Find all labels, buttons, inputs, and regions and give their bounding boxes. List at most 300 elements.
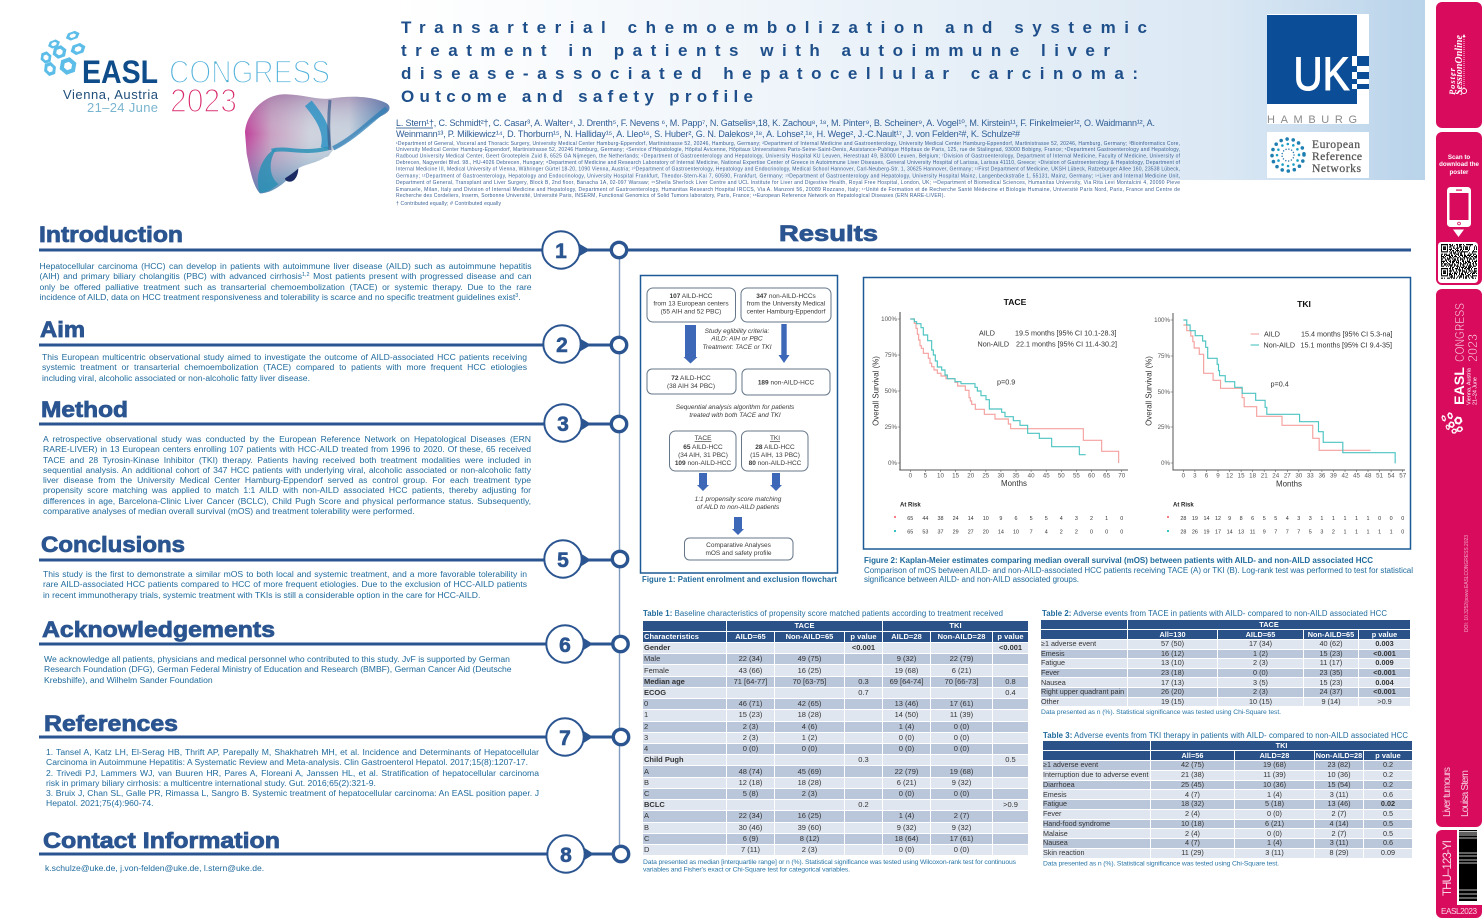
table 2: TACE adverse events: 0.004 [1375, 678, 1394, 687]
table 1: baseline characteristics: 43 (66) [739, 666, 762, 675]
table 2: TACE adverse events: 16 (12) [1161, 649, 1184, 658]
heading: Contact Information: Contact Information [43, 828, 280, 853]
table 1: baseline characteristics: 22 (79) [950, 654, 973, 663]
table 1: baseline characteristics: 3 [644, 733, 648, 742]
at-risk table: TKI: 19 [1204, 530, 1210, 536]
text: aim: including viral, alcoholic associated or non-alcoholic fatty liver disease. [42, 373, 310, 383]
step marker 3 [544, 404, 627, 442]
at-risk table: TKI: 2 [1332, 530, 1335, 536]
table 3: TKI adverse events: Fever [1043, 809, 1061, 818]
liver illustration [245, 94, 390, 193]
side panel: poster session online: SessionOnline [1454, 34, 1465, 95]
table 1: baseline characteristics: 0 (0) [954, 722, 969, 731]
table 2: TACE adverse events: 19 (15) [1161, 697, 1184, 706]
table 1: baseline characteristics: 8 (12) [800, 834, 819, 843]
chart: TKI: Months [1276, 480, 1302, 488]
table 1: baseline characteristics: AILD=28 [891, 632, 922, 641]
table 1: baseline characteristics: 16 (25) [798, 666, 821, 675]
affiliations: Germany; ¹²Department of Gastroenterology, Hepatology and Endocrinology, University Hospital Frankfurt, Theodor-Stern-Kai 7, 60590, Frankfurt, Germany; ¹³Department of Gastroenterology and Hepatology, University Hospital Mainz, Langenbeckstraße 1, 55131, Mainz, Germany; ¹⁴Liver and Internal Medicine Unit, [396, 173, 1180, 179]
topic: Liver tumours [1442, 767, 1453, 817]
table 1: baseline characteristics: 0 (0) [954, 845, 969, 854]
at-risk table: TKI: At Risk [1173, 502, 1194, 508]
table 2: TACE adverse events: 23 (18) [1161, 668, 1184, 677]
table 1: baseline characteristics: 22 (79) [895, 767, 918, 776]
text: conclusions [43, 569, 527, 600]
side panel: poster session online: Poster [1447, 67, 1457, 95]
table 2: TACE adverse events: 0.009 [1375, 658, 1394, 667]
affiliations [396, 141, 1181, 207]
table 1: baseline characteristics: 0.8 [1005, 677, 1016, 686]
box: non-AILD cohort [741, 288, 831, 322]
table 2: TACE adverse events: AILD=65 [1246, 630, 1275, 638]
at-risk table: TACE: 10 [983, 516, 989, 522]
table 3: TKI adverse events: 2 (7) [1331, 829, 1346, 838]
side panel: congress logo and session details [1436, 289, 1482, 827]
table 1: baseline characteristics: 1 (2) [802, 733, 817, 742]
at-risk table: TACE: 9 [999, 516, 1002, 522]
table 1: baseline characteristics [643, 621, 1028, 855]
chart: TKI: 42 [1342, 472, 1349, 480]
text: references: 1. Tansel A, Katz LH, El-Serag HB, Thrift AP, Parepally M, Shakhatreh MH, et al. Incidence and Determinants of Hepatocellular [46, 747, 539, 757]
table 1: baseline characteristics: >0.9 [1003, 800, 1018, 809]
table 3: TKI adverse events: Interruption due to adverse event [1043, 770, 1148, 779]
table 1: baseline characteristics: 2 [644, 722, 648, 731]
table 3: TKI adverse events: Nausea [1043, 838, 1068, 847]
table 1: baseline characteristics: Characteristics [644, 632, 699, 641]
icon: down triangle [1453, 230, 1464, 237]
at-risk table: TKI: 7 [1286, 530, 1289, 536]
table 2: TACE adverse events: 17 (34) [1249, 639, 1272, 648]
table 1: baseline characteristics: 12 (18) [739, 778, 762, 787]
table 3: TKI adverse events: 4 (7) [1185, 838, 1200, 847]
table 1: baseline characteristics: 4 [644, 744, 648, 753]
chart: TACE: 30 [997, 472, 1005, 480]
table 1: baseline characteristics: 0.3 [858, 677, 869, 686]
rotated EASL logo: CONGRESS [1452, 303, 1467, 362]
table 2: TACE adverse events: 13 (10) [1161, 658, 1184, 667]
table 3: TKI adverse events: TKI [1276, 740, 1287, 750]
table 3: TKI adverse events: 6 (21) [1265, 819, 1284, 828]
affiliations: Internal Medicine III, Medical University of Vienna, Währinger Gürtel 18-20, 1090 Vienna, Austria; ¹⁰Department of Gastroenterology, Hepatology and Endocrinology, Medical School Hannover, Carl-Neuberg-Str. 1, 30625 Hannover, Germany; ¹¹First Department of Medicine, UKSH Lübeck, Ratzeburger Allee 160, 23538 Lübeck, [396, 167, 1180, 173]
table 3: TKI adverse events: 0 (0) [1267, 829, 1282, 838]
table 1: baseline characteristics: BCLC [644, 800, 665, 809]
chart: TACE: 40 [1028, 472, 1035, 480]
box: 72 AILD-HCC [647, 369, 736, 394]
table 3: TKI adverse events: 2 (4) [1185, 809, 1200, 818]
at-risk table: TACE: At Risk [900, 502, 921, 508]
chart: TKI: Non-AILD [1264, 340, 1295, 350]
table 3: TKI adverse events: Emesis [1043, 790, 1067, 799]
table 3: TKI adverse events: 8 (29) [1329, 848, 1349, 857]
step marker 2 [543, 325, 627, 363]
at-risk table: TACE: 2 [1090, 516, 1093, 522]
box: TACE group: 109 non-AILD-HCC [675, 460, 731, 467]
at-risk table: TACE: 20 [983, 530, 989, 536]
chart: TACE [872, 297, 1128, 488]
table 1: baseline characteristics: 2 (3) [743, 733, 758, 742]
chart: TKI: 39 [1330, 472, 1337, 480]
table 3: TKI adverse events: 2 (7) [1331, 809, 1346, 818]
side panel: poster session online [1436, 2, 1482, 128]
table 3: TKI adverse events: 3 (11) [1330, 838, 1348, 847]
chart: TACE: 0 [909, 472, 913, 480]
heading: Method: Method [41, 397, 128, 422]
at-risk table: TKI: 1 [1332, 516, 1335, 522]
table 1: baseline characteristics: A [644, 767, 649, 776]
table 1: baseline characteristics: B [644, 823, 649, 832]
chart: TKI: 15.1 months [95% CI 9.4-35] [1300, 340, 1392, 350]
propensity matching note: 1:1 propensity score matching [695, 496, 782, 503]
figure 2 caption: Figure 2: Kaplan-Meier estimates comparing median overall survival (mOS) between patients with AILD- and non-AILD associated HCC [864, 556, 1373, 565]
at-risk table: TACE: 53 [922, 530, 928, 536]
at-risk table: TKI: 0 [1390, 516, 1393, 522]
table 1: baseline characteristics: 30 (46) [739, 823, 762, 832]
table 3: TKI adverse events: 19 (68) [1263, 760, 1286, 769]
poster title: Transarterial chemoembolization and systemic [401, 18, 1147, 37]
table 3: TKI adverse events: 13 (46) [1327, 799, 1351, 808]
table 1: baseline characteristics: Non-AILD=28 [938, 632, 985, 641]
at-risk table: TACE: 0 [1090, 530, 1093, 536]
at-risk table: TACE: 7 [1030, 530, 1033, 536]
table 2: TACE adverse events: Right upper quadrant pain [1041, 687, 1124, 696]
heading: Introduction: Introduction [39, 222, 183, 247]
table 1: baseline characteristics: 6 (21) [897, 778, 916, 787]
at-risk table: TKI: 3 [1320, 530, 1323, 536]
table 1: baseline characteristics: C [644, 834, 649, 843]
heading: Aim: Aim [40, 317, 85, 342]
side panel: scan to download: Scan to [1448, 154, 1470, 161]
table 2: TACE adverse events: 2 (3) [1253, 658, 1268, 667]
text: method: A retrospective observational study was conducted by the European Reference Network on Hepatological Diseases (ERN [43, 434, 531, 444]
box: non-AILD cohort: 347 non-AILD-HCCs [756, 293, 817, 300]
eligibility criteria note: Treatment: TACE or TKI [702, 344, 772, 351]
authors [396, 118, 1155, 139]
table 1: baseline characteristics: 6 (21) [952, 666, 971, 675]
at-risk table: TKI: 0 [1401, 516, 1404, 522]
text: introduction: only be offered palliative treatment such as transarterial chemoembolization (TACE) or systemic therapy. Due to the rare [40, 282, 532, 292]
at-risk table: TACE: 0 [1120, 516, 1123, 522]
rotated EASL logo [1441, 303, 1480, 434]
authors: L. Stern¹†, C. Schmidt²†, C. Casar³, A. Walter⁴, J. Drenth⁵, F. Nevens ⁶, M. Papp⁷, N. Gatselis⁸,18, K. Zachou⁸, ¹⁸, M. Pinter⁹, B. Scheiner⁹, A. Vogel¹⁰, M. Kirstein¹¹, F. Finkelmeier¹², O. Waidmann¹², A. [396, 118, 1155, 128]
table 1: baseline characteristics: 0.7 [858, 688, 869, 697]
at-risk table: TKI: 26 [1192, 530, 1198, 536]
table 3: TKI adverse events: Malaise [1043, 829, 1068, 838]
table 2: TACE adverse events: 2 (3) [1253, 687, 1268, 696]
table 2: TACE adverse events: 26 (20) [1161, 687, 1184, 696]
chart: TKI: 48 [1365, 472, 1372, 480]
table 2: TACE adverse events: Fever [1041, 668, 1059, 677]
chart: TACE: 25 [982, 472, 990, 480]
table 3: TKI adverse events: 0 (0) [1267, 809, 1282, 818]
table 3: TKI adverse events: Hand-food syndrome [1043, 819, 1110, 828]
table 3: TKI adverse events: 23 (82) [1327, 760, 1351, 769]
chart: TKI: 25% [1158, 424, 1170, 431]
table 3: TKI adverse events: Fatigue [1043, 799, 1067, 808]
chart: TACE: 50% [885, 388, 897, 395]
arrow: to analyses [732, 517, 744, 535]
chart: TKI: AILD [1264, 330, 1280, 338]
step marker 7: 7 [559, 727, 571, 750]
European Reference Networks logo [1267, 132, 1369, 178]
box: 189 non-AILD-HCC [742, 369, 830, 395]
at-risk table: TACE: 6 [1014, 516, 1018, 522]
box: comparative analyses [684, 538, 793, 560]
chart: TKI: 24 [1272, 472, 1280, 480]
at-risk table: TACE: 65 [907, 516, 913, 522]
text: method [43, 434, 531, 516]
eligibility criteria note: AILD: AIH or PBC [710, 336, 763, 342]
box: AILD cohort: from 13 European centers [653, 300, 729, 308]
table 3: TKI adverse events: 42 (75) [1181, 760, 1204, 769]
chart: TKI: Overall Survival (%) [1144, 356, 1154, 426]
figure 2 caption: significance between AILD- and non-AILD associated groups. [864, 575, 1079, 584]
at-risk table: TKI: 13 [1238, 530, 1244, 536]
table 1: baseline characteristics: 9 (32) [952, 778, 971, 787]
at-risk table: TACE: 65 [907, 530, 913, 536]
box: comparative analyses: mOS and safety profile [705, 550, 772, 557]
table 3: TKI adverse events: 0.02 [1381, 799, 1395, 808]
table 1: baseline characteristics: 4 (6) [802, 722, 817, 731]
text: method: differences in age, Barcelona-Clinic Liver Cancer (BCLC), Child Pugh Score and physical performance status. Subsequently, [43, 496, 531, 506]
table 1: baseline characteristics: 70 [63-75] [793, 677, 826, 686]
table 2: TACE adverse events: 23 (35) [1319, 668, 1343, 677]
table 2: TACE adverse events: 24 (37) [1319, 687, 1343, 696]
at-risk table: TACE: 27 [968, 530, 974, 536]
chart: TACE: Non-AILD [978, 340, 1009, 348]
at-risk table: TKI: 3 [1309, 516, 1312, 522]
box: non-AILD cohort: from the University Medical [747, 300, 826, 308]
affiliations: Debrecen, Nagyerdei Blvd. 98., HU-4026 Debrecen, Hungary; ⁸Department of Medicine and Research Laboratory of Internal Medicine, National Expertise Center of Greece in Autoimmune Liver Diseases, General University Hospital of Larissa, Larissa 41110, Greece; ⁹Division of Gastroenterology & Hepatology, Department of [396, 160, 1181, 166]
at-risk table: TKI: 1 [1355, 530, 1358, 536]
at-risk table: TACE: 5 [1045, 516, 1048, 522]
chart: TACE: 5 [924, 472, 928, 480]
table 1: baseline characteristics: 9 (32) [952, 823, 971, 832]
at-risk table: TKI: 1 [1366, 530, 1370, 536]
table 3 caption: Table 3: Adverse events from TKI therapy in patients with AILD- compared to non-AILD associated HCC [1043, 731, 1408, 740]
table 2: TACE adverse events: 1 (2) [1253, 649, 1268, 658]
table 3: TKI adverse events: 0.09 [1381, 848, 1395, 857]
poster title [401, 18, 1147, 106]
chart: TKI: 33 [1307, 472, 1314, 480]
table 2: TACE adverse events: Non-AILD=65 [1308, 630, 1354, 638]
at-risk table: TACE: 2 [1075, 530, 1078, 536]
European Reference Networks logo: European [1312, 138, 1360, 151]
at-risk table: TACE: 4 [1060, 516, 1063, 522]
side panel: barcode and poster ID [1436, 830, 1482, 918]
table 3: TKI adverse events: 4 (7) [1185, 790, 1200, 799]
table 3: TKI adverse events: 0.5 [1383, 829, 1393, 838]
at-risk table: TACE: 29 [953, 530, 959, 536]
table 3: TKI adverse events: 15 (54) [1327, 780, 1351, 789]
table 1: baseline characteristics: Median age [644, 677, 685, 686]
table 3: TKI adverse events: 3 (11) [1330, 790, 1348, 799]
table 1: baseline characteristics: <0.001 [999, 643, 1022, 652]
table 1: baseline characteristics: 0 (0) [899, 789, 914, 798]
at-risk table: TACE: 0 [1120, 530, 1123, 536]
at-risk table: TKI: 28 [1180, 530, 1186, 536]
chart: TKI: 100% [1154, 317, 1170, 324]
text: aim: systemic treatment or transarterial chemoembolization (TACE) compared to patients with more frequent HCC etiologies [42, 362, 527, 372]
chart: TACE: Months [1001, 479, 1027, 488]
table 1: baseline characteristics: 17 (61) [950, 699, 973, 708]
chart: TKI: 21 [1261, 472, 1268, 480]
step marker 3: 3 [557, 413, 569, 436]
table 1: baseline characteristics: 1 [644, 710, 648, 719]
table 3: TKI adverse events: ≥1 adverse event [1043, 760, 1098, 769]
chart: TACE: 100% [881, 316, 897, 323]
chart: TACE: 50 [1058, 472, 1065, 480]
text: references [46, 747, 539, 808]
box: TKI group [742, 431, 808, 471]
chart: TKI: 45 [1353, 472, 1360, 480]
chart: TKI: 15.4 months [95% CI 5.3-na] [1301, 330, 1392, 338]
rotated EASL logo: EASL [1451, 367, 1467, 405]
table 2: TACE adverse events: Emesis [1041, 649, 1065, 658]
step marker 6: 6 [559, 634, 571, 657]
table 3: TKI adverse events: 0.5 [1383, 809, 1393, 818]
UKE Hamburg logo: HAMBURG [1267, 114, 1357, 126]
at-risk table: TKI: 5 [1309, 530, 1312, 536]
at-risk table: TACE: 38 [938, 516, 944, 522]
table 2: TACE adverse events: p value [1372, 630, 1397, 638]
at-risk table: TKI: 5 [1274, 516, 1277, 522]
table 1: baseline characteristics: ECOG [644, 688, 666, 697]
text: aim: This European multicentric observational study aimed to investigate the outcome of AILD-associated HCC patients receiving [42, 352, 527, 362]
table 3: TKI adverse events: p value [1375, 750, 1401, 760]
at-risk table: TKI: 7 [1297, 530, 1300, 536]
UKE Hamburg logo [1267, 14, 1369, 126]
chart: TACE: 25% [885, 424, 897, 431]
text: method: sequential analysis. An additional cohort of 347 HCC patients with underlying viral, alcoholic associated or non-alcoholic fatty [43, 465, 531, 475]
text: method: liver disease from the University Medical Center Hamburg-Eppendorf served as control group. For each treatment type [43, 475, 531, 485]
text: introduction [40, 261, 532, 302]
table 2: TACE adverse events: <0.001 [1373, 668, 1396, 677]
chart: TKI: 54 [1388, 472, 1395, 480]
box: TKI group: (15 AIH, 13 PBC) [750, 452, 800, 459]
step marker 5: 5 [557, 549, 569, 572]
table 3: TKI adverse events: 0.6 [1383, 790, 1393, 799]
box: AILD cohort: (55 AIH and 52 PBC) [661, 308, 721, 316]
at-risk table: TKI: 8 [1240, 516, 1243, 522]
table 1: baseline characteristics: 22 (34) [739, 654, 762, 663]
table 1: baseline characteristics: 49 (75) [798, 654, 821, 663]
at-risk table: TKI: 14 [1204, 516, 1210, 522]
table 3: TKI adverse events: 18 (32) [1181, 799, 1204, 808]
DOI: DOI: 10.3252/poww.EASLCONGRESS.2023 [1464, 535, 1470, 632]
table 1: baseline characteristics: 11 (39) [950, 710, 973, 719]
rotated EASL logo: 2023 [1465, 334, 1480, 362]
affiliations: Radboud University Medical Center, Geert Grooteplein Zuid 8, 6525 GA Nijmegen, the Netherlands; ⁶Department of Gastroenterology and Hepatology, University Hospital KU Leuven, Herestraat 49, B3000 Leuven, Belgium; ⁷Division of Gastroenterology, Department of Internal Medicine, Faculty of Medicine, University of [396, 154, 1181, 160]
EASL Congress logo [39, 30, 330, 119]
table 1: baseline characteristics: Male [644, 654, 660, 663]
results rule [619, 248, 1411, 252]
at-risk table: TACE: 14 [968, 516, 974, 522]
table 3: TKI adverse events: 4 (14) [1329, 819, 1349, 828]
table 1: baseline characteristics: 0 (0) [954, 744, 969, 753]
EASL Congress logo: CONGRESS [169, 54, 330, 90]
table 1: baseline characteristics: 18 (28) [798, 710, 821, 719]
step marker 5 [544, 540, 628, 578]
text: conclusions: rare AILD-associated HCC patients compared to HCC of more frequent etiologies. Due to the exclusion of HCC-AILD patients [43, 579, 527, 589]
box: TACE group: 65 AILD-HCC [683, 444, 723, 451]
chart: TACE: 15 [952, 472, 960, 480]
sequential analysis note: treated with both TACE and TKI [689, 412, 781, 419]
chart: TKI: 57 [1399, 472, 1407, 480]
at-risk table: TACE: 44 [922, 516, 928, 522]
table 1: baseline characteristics: 0.4 [1005, 688, 1016, 697]
table 3: TKI adverse events: 0.5 [1383, 819, 1393, 828]
table 1 footnote [643, 859, 1017, 874]
table 2: TACE adverse events: TACE [1259, 620, 1279, 628]
box: comparative analyses: Comparative Analyses [706, 542, 772, 549]
text: acknowledgements: We acknowledge all patients, physicians and medical personnel who contributed to this study. JvF is supported by German [44, 654, 510, 664]
chart: TACE: AILD [979, 328, 995, 338]
arrow: TKI down [770, 473, 782, 491]
text: acknowledgements: Krebshilfe), and Wilhelm Sander Foundation [44, 675, 213, 685]
table 1: baseline characteristics: 0 (0) [802, 744, 817, 753]
chart: TACE: 70 [1118, 472, 1126, 480]
chart: TKI: 6 [1205, 472, 1209, 480]
chart: TACE: 20 [967, 472, 975, 480]
at-risk table: TKI: 12 [1215, 516, 1221, 522]
text: method: comparative analyses of median overall survival (mOS) and treatment tolerability were performed. [43, 506, 415, 516]
sequential analysis note [676, 404, 795, 419]
table 1: baseline characteristics: 18 (28) [798, 778, 821, 787]
table 1: baseline characteristics: A [644, 811, 649, 820]
arrow: non-AILD down [778, 324, 790, 363]
table 1: baseline characteristics: 70 [66-73] [945, 677, 978, 686]
at-risk table: TACE: 3 [1075, 516, 1078, 522]
side panel: scan to download: download the [1439, 161, 1479, 168]
chart: TKI: 51 [1376, 472, 1384, 480]
table 1: baseline characteristics: <0.001 [852, 643, 875, 652]
text: introduction: incidence of AILD, data on HCC treatment responsiveness and tolerability is scarce and no specific treatment guidelines exist3. [40, 292, 521, 302]
table 2: TACE adverse events: ≥1 adverse event [1041, 639, 1096, 648]
table 1 footnote: Data presented as median [interquartile range] or n (%). Statistical significance was tested using Wilcoxon-rank test for continuous [643, 859, 1017, 866]
box: 72 AILD-HCC: 72 AILD-HCC [671, 375, 711, 382]
text: contact: k.schulze@uke.de, j.von-felden@uke.de, l.stern@uke.de. [45, 863, 264, 873]
table 3: TKI adverse events: 3 (11) [1265, 848, 1284, 857]
at-risk table: TKI: 1 [1355, 516, 1358, 522]
at-risk table: TACE [894, 502, 1123, 536]
affiliations: Emanuele, Milan, Italy and Division of Internal Medicine and Hepatology, Department of Gastroenterology, Humanitas Research Hospital IRCCS, Via A. Manzoni 56, 20089 Rozzano, Italy; ¹⁷Unité de Formation et de Recherche Santé Médecine et Biologie Humaine, Université Paris Nord, Paris, France and Centre de [396, 187, 1180, 193]
table 1: baseline characteristics: 0 (0) [954, 789, 969, 798]
poster number: THU–123-YI [1442, 840, 1454, 896]
chart: TKI: 27 [1284, 472, 1291, 480]
text: aim [42, 352, 527, 383]
at-risk table: TKI: 9 [1263, 530, 1266, 536]
congress tag: EASL2023 [1441, 907, 1477, 916]
table 1: baseline characteristics: C [644, 789, 649, 798]
table 1: baseline characteristics: 9 (32) [897, 823, 916, 832]
at-risk table: TKI: 9 [1228, 516, 1231, 522]
chart: TKI: 50% [1158, 389, 1170, 396]
propensity matching note [695, 496, 782, 511]
step marker 1: 1 [555, 240, 567, 263]
chart: TACE: 19.5 months [95% CI 10.1-28.3] [1015, 328, 1116, 338]
box: TACE group [670, 431, 736, 471]
chart: TACE: 22.1 months [95% CI 11.4-30.2] [1016, 340, 1117, 348]
at-risk table: TKI: 5 [1263, 516, 1266, 522]
table 2: TACE adverse events: 3 (5) [1253, 678, 1268, 687]
text: introduction: Hepatocellular carcinoma (HCC) can develop in patients with autoimmune liver disease (AILD) such as autoimmune hepatitis [40, 261, 532, 271]
at-risk table: TACE: 14 [998, 530, 1004, 536]
step marker 2: 2 [556, 334, 568, 357]
table 1: baseline characteristics: 22 (34) [739, 811, 762, 820]
table 1: baseline characteristics: 17 (61) [950, 834, 973, 843]
barcode [1459, 830, 1477, 901]
at-risk table: TKI: 0 [1401, 530, 1404, 536]
